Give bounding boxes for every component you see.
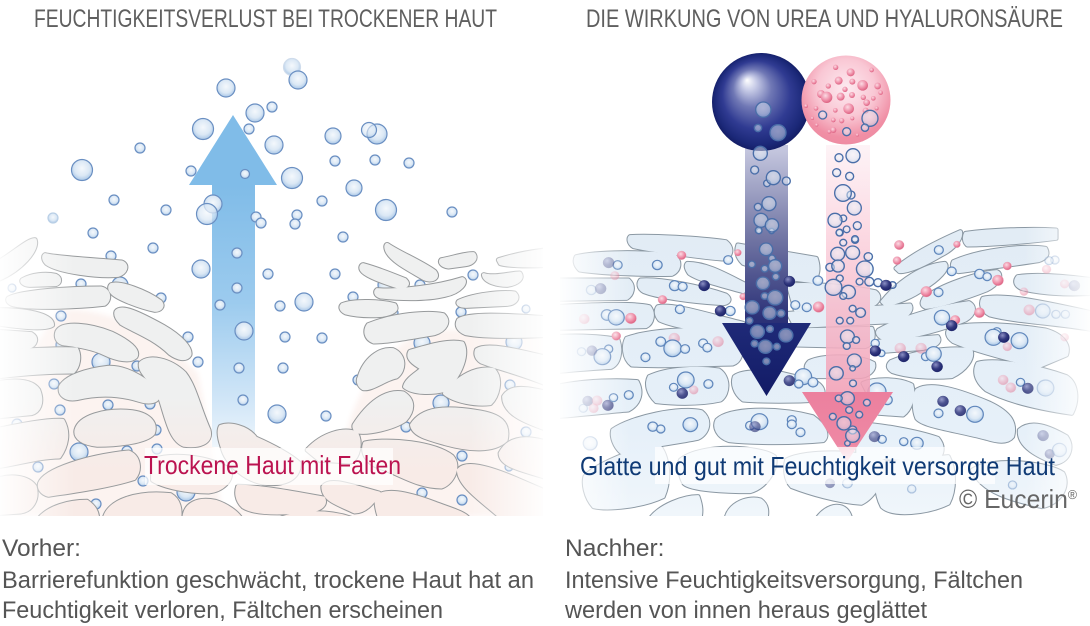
text block: after: Nachher: <box>565 535 664 562</box>
text block: before <box>2 535 534 624</box>
heading: moisture loss: FEUCHTIGKEITSVERLUST BEI TROCKENER HAUT <box>34 5 497 33</box>
bubbles inside urea arrow <box>745 228 795 365</box>
panel: dry skin illustration <box>0 58 549 520</box>
text block: after <box>564 535 1023 624</box>
edge fades <box>0 230 545 520</box>
arrow: hyaluronic acid penetrating skin <box>802 145 893 462</box>
text block: after: Intensive Feuchtigkeitsversorgung, Fältchen <box>565 567 1023 594</box>
label: dry skin with wrinkles: Trockene Haut mit Falten <box>144 450 401 480</box>
text block: before: Vorher: <box>2 535 81 562</box>
panel: hydrated skin illustration <box>555 145 1090 520</box>
skin cells smooth <box>555 229 1090 520</box>
copyright Eucerin: © Eucerin <box>959 484 1074 514</box>
bubbles inside hyaluronic arrow <box>825 229 896 446</box>
white label band <box>145 448 393 485</box>
edge fades <box>560 225 1090 520</box>
text block: after: werden von innen heraus geglättet <box>564 597 927 624</box>
arrow: moisture escaping upward <box>189 115 277 447</box>
skin background wash <box>38 310 506 516</box>
arrow: urea penetrating skin <box>722 145 811 396</box>
skin cells with wrinkle <box>0 240 549 520</box>
sphere: urea <box>712 53 810 234</box>
white label band <box>655 447 995 484</box>
rising water bubbles <box>8 58 531 509</box>
text block: before: Barrierefunktion geschwächt, trockene Haut hat an <box>2 567 534 594</box>
text block: before: Feuchtigkeit verloren, Fältchen erscheinen <box>2 597 443 624</box>
copyright Eucerin: ® <box>1068 487 1077 502</box>
sphere: hyaluronic acid <box>802 56 890 242</box>
active ingredient particles in cells <box>577 240 1080 493</box>
